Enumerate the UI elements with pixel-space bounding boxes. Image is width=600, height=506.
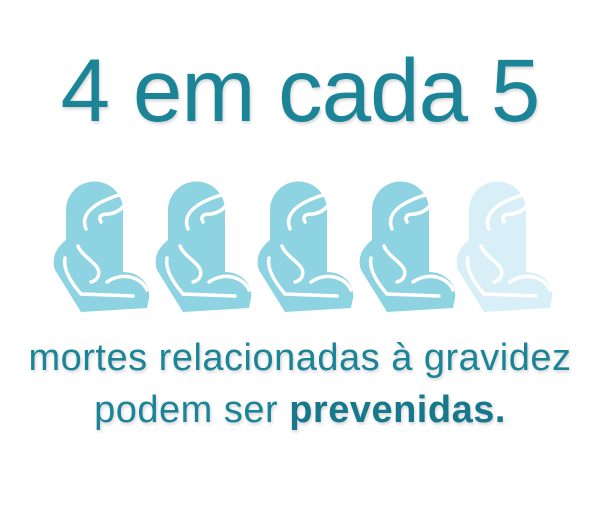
icon: pregnant woman 5 faded	[457, 182, 552, 312]
icon: pregnant woman 4	[360, 182, 455, 312]
icon: pregnant woman 3	[258, 182, 353, 312]
subtitle text: podem ser prevenidas.	[94, 389, 506, 431]
subtitle text: mortes relacionadas à gravidez	[28, 337, 572, 379]
subtitle text	[28, 337, 572, 434]
icon: pregnant woman 2	[156, 182, 251, 312]
icon: pregnant woman 1	[54, 182, 149, 312]
title: 4 em cada 5	[61, 40, 539, 140]
